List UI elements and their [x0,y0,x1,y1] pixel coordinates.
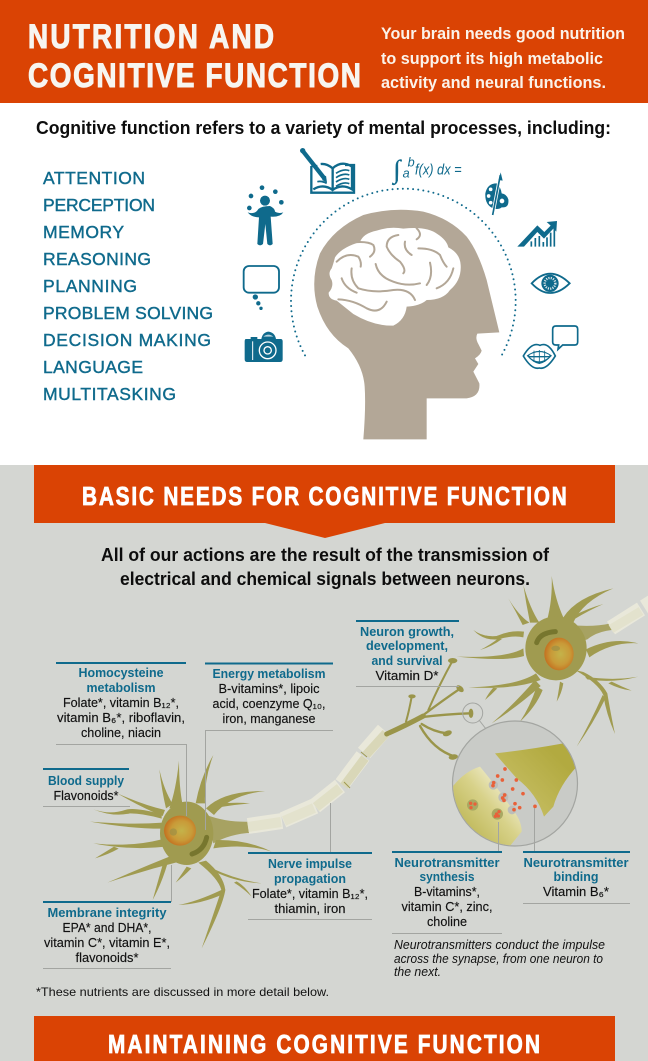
synapse note: the next. [394,965,441,979]
nucleus [164,816,196,846]
brain [329,228,461,326]
label: neuron growth [356,620,459,687]
label: neurotransmitter binding [523,851,630,904]
right nucleus [544,638,574,670]
head illustration with icons [244,148,578,439]
list of mental processes: ATTENTION [43,168,145,188]
label: nerve impulse propagation [248,852,372,920]
formula: ∫ [391,155,402,185]
right neuron [457,576,638,747]
label: homocysteine metabolism: Folate*, vitamin B₁₂*, [63,695,179,710]
label: membrane integrity [43,901,171,969]
label: nerve impulse propagation: thiamin, iron [274,901,346,916]
section intro text [101,545,550,589]
list of mental processes: MULTITASKING [43,384,176,404]
icon: juggler [247,185,284,245]
title [28,17,361,95]
icon: camera [245,332,283,362]
formula [391,155,462,185]
label: energy metabolism [205,662,333,731]
dotted arc [291,189,516,355]
banner: maintaining cognitive function [34,1016,615,1061]
section intro text: All of our actions are the result of the transmission of [101,545,550,565]
synaptic shapes [453,744,575,846]
label: neurotransmitter synthesis: synthesis [420,869,474,884]
header intro text: activity and neural functions. [381,73,606,92]
icon: palette and brush [485,172,508,215]
label: neurotransmitter binding: Neurotransmitter [524,855,628,870]
list of mental processes [43,168,213,404]
title: COGNITIVE FUNCTION [28,56,361,95]
header intro text [381,24,625,92]
label: nerve impulse propagation: propagation [274,871,346,886]
label: nerve impulse propagation: Folate*, vitamin B₁₂*, [252,886,368,901]
icon: eye [532,274,570,293]
label: energy metabolism: B-vitamins*, lipoic [218,681,320,696]
label: blood supply: Blood supply [48,773,125,788]
section intro text: electrical and chemical signals between neurons. [120,569,530,589]
label: neuron growth: and survival [372,653,442,668]
synapse note: across the synapse, from one neuron to [394,952,603,966]
header intro text: Your brain needs good nutrition [381,24,625,43]
label: neurotransmitter synthesis: choline [427,914,467,929]
label: membrane integrity: flavonoids* [76,950,138,965]
right neuron dendrites [457,576,638,747]
list of mental processes: PERCEPTION [43,195,155,215]
label: homocysteine metabolism: vitamin B₆*, riboflavin, [57,710,185,725]
synapse note: Neurotransmitters conduct the impulse [394,938,605,952]
label: neurotransmitter synthesis [392,851,502,934]
list of mental processes: DECISION MAKING [43,330,211,350]
synapse note [394,938,605,979]
connector lines [171,730,331,902]
banner: basic needs: BASIC NEEDS FOR COGNITIVE FUNCTION [82,482,567,511]
right neuron cell body [525,616,587,680]
footnote: *These nutrients are discussed in more detail below. [36,985,329,999]
label: homocysteine metabolism: choline, niacin [81,725,161,740]
label: energy metabolism: acid, coenzyme Q₁₀, [212,696,326,711]
label: neuron growth: Vitamin D* [376,668,438,683]
banner: basic needs [34,465,615,538]
synapse magnifier [450,703,580,852]
grey section background [0,465,648,1061]
label: membrane integrity: Membrane integrity [48,905,167,920]
title: NUTRITION AND [28,17,274,56]
header intro text: to support its high metabolic [381,49,603,68]
label: homocysteine metabolism: Homocysteine [78,665,164,680]
list of mental processes: LANGUAGE [43,357,143,377]
label: energy metabolism: iron, manganese [222,711,316,726]
list of mental processes: REASONING [43,249,151,269]
formula: b [408,156,415,170]
left neuron [90,755,272,948]
label: blood supply: Flavonoids* [54,788,118,803]
label: blood supply [43,768,130,807]
label: homocysteine metabolism: metabolism [86,680,156,695]
formula: f(x) dx = [415,163,462,179]
neuron dendrites [90,755,272,948]
header band [0,0,648,103]
label: neuron growth: Neuron growth, [360,624,454,639]
list of mental processes: PROBLEM SOLVING [43,303,213,323]
label: neuron growth: development, [366,638,448,653]
label: membrane integrity: EPA* and DHA*, [62,920,152,935]
label: membrane integrity: vitamin C*, vitamin E*, [44,935,170,950]
list of mental processes: PLANNING [43,276,137,296]
label: neurotransmitter binding: Vitamin B₆* [543,884,609,899]
icon: rising chart [517,221,557,247]
icon: thought bubble [244,266,279,310]
formula: a [403,167,410,181]
axon hillock left [207,815,252,843]
label: energy metabolism: Energy metabolism [212,666,326,681]
right mitochondrion [537,632,555,643]
right axon myelin [611,602,648,629]
label: neurotransmitter synthesis: vitamin C*, zinc, [402,899,492,914]
cognitive function intro heading: Cognitive function refers to a variety of mental processes, including: [36,118,611,138]
label: neurotransmitter synthesis: Neurotransmitter [394,855,500,870]
icon: mouth with speech bubble [523,326,578,368]
neuron cell body [160,802,213,865]
list of mental processes: MEMORY [43,222,124,242]
label: nerve impulse propagation: Nerve impulse [268,856,352,871]
axon with myelin sheath [248,730,386,827]
head silhouette [314,210,499,439]
axon terminals [387,658,473,760]
banner: maintaining cognitive function: MAINTAINING COGNITIVE FUNCTION [108,1030,540,1059]
label: homocysteine metabolism [56,662,186,745]
label: neurotransmitter binding: binding [554,869,599,884]
mitochondrion [192,837,207,854]
label: neurotransmitter synthesis: B-vitamins*, [414,884,480,899]
icon: book and pencil [300,148,354,193]
